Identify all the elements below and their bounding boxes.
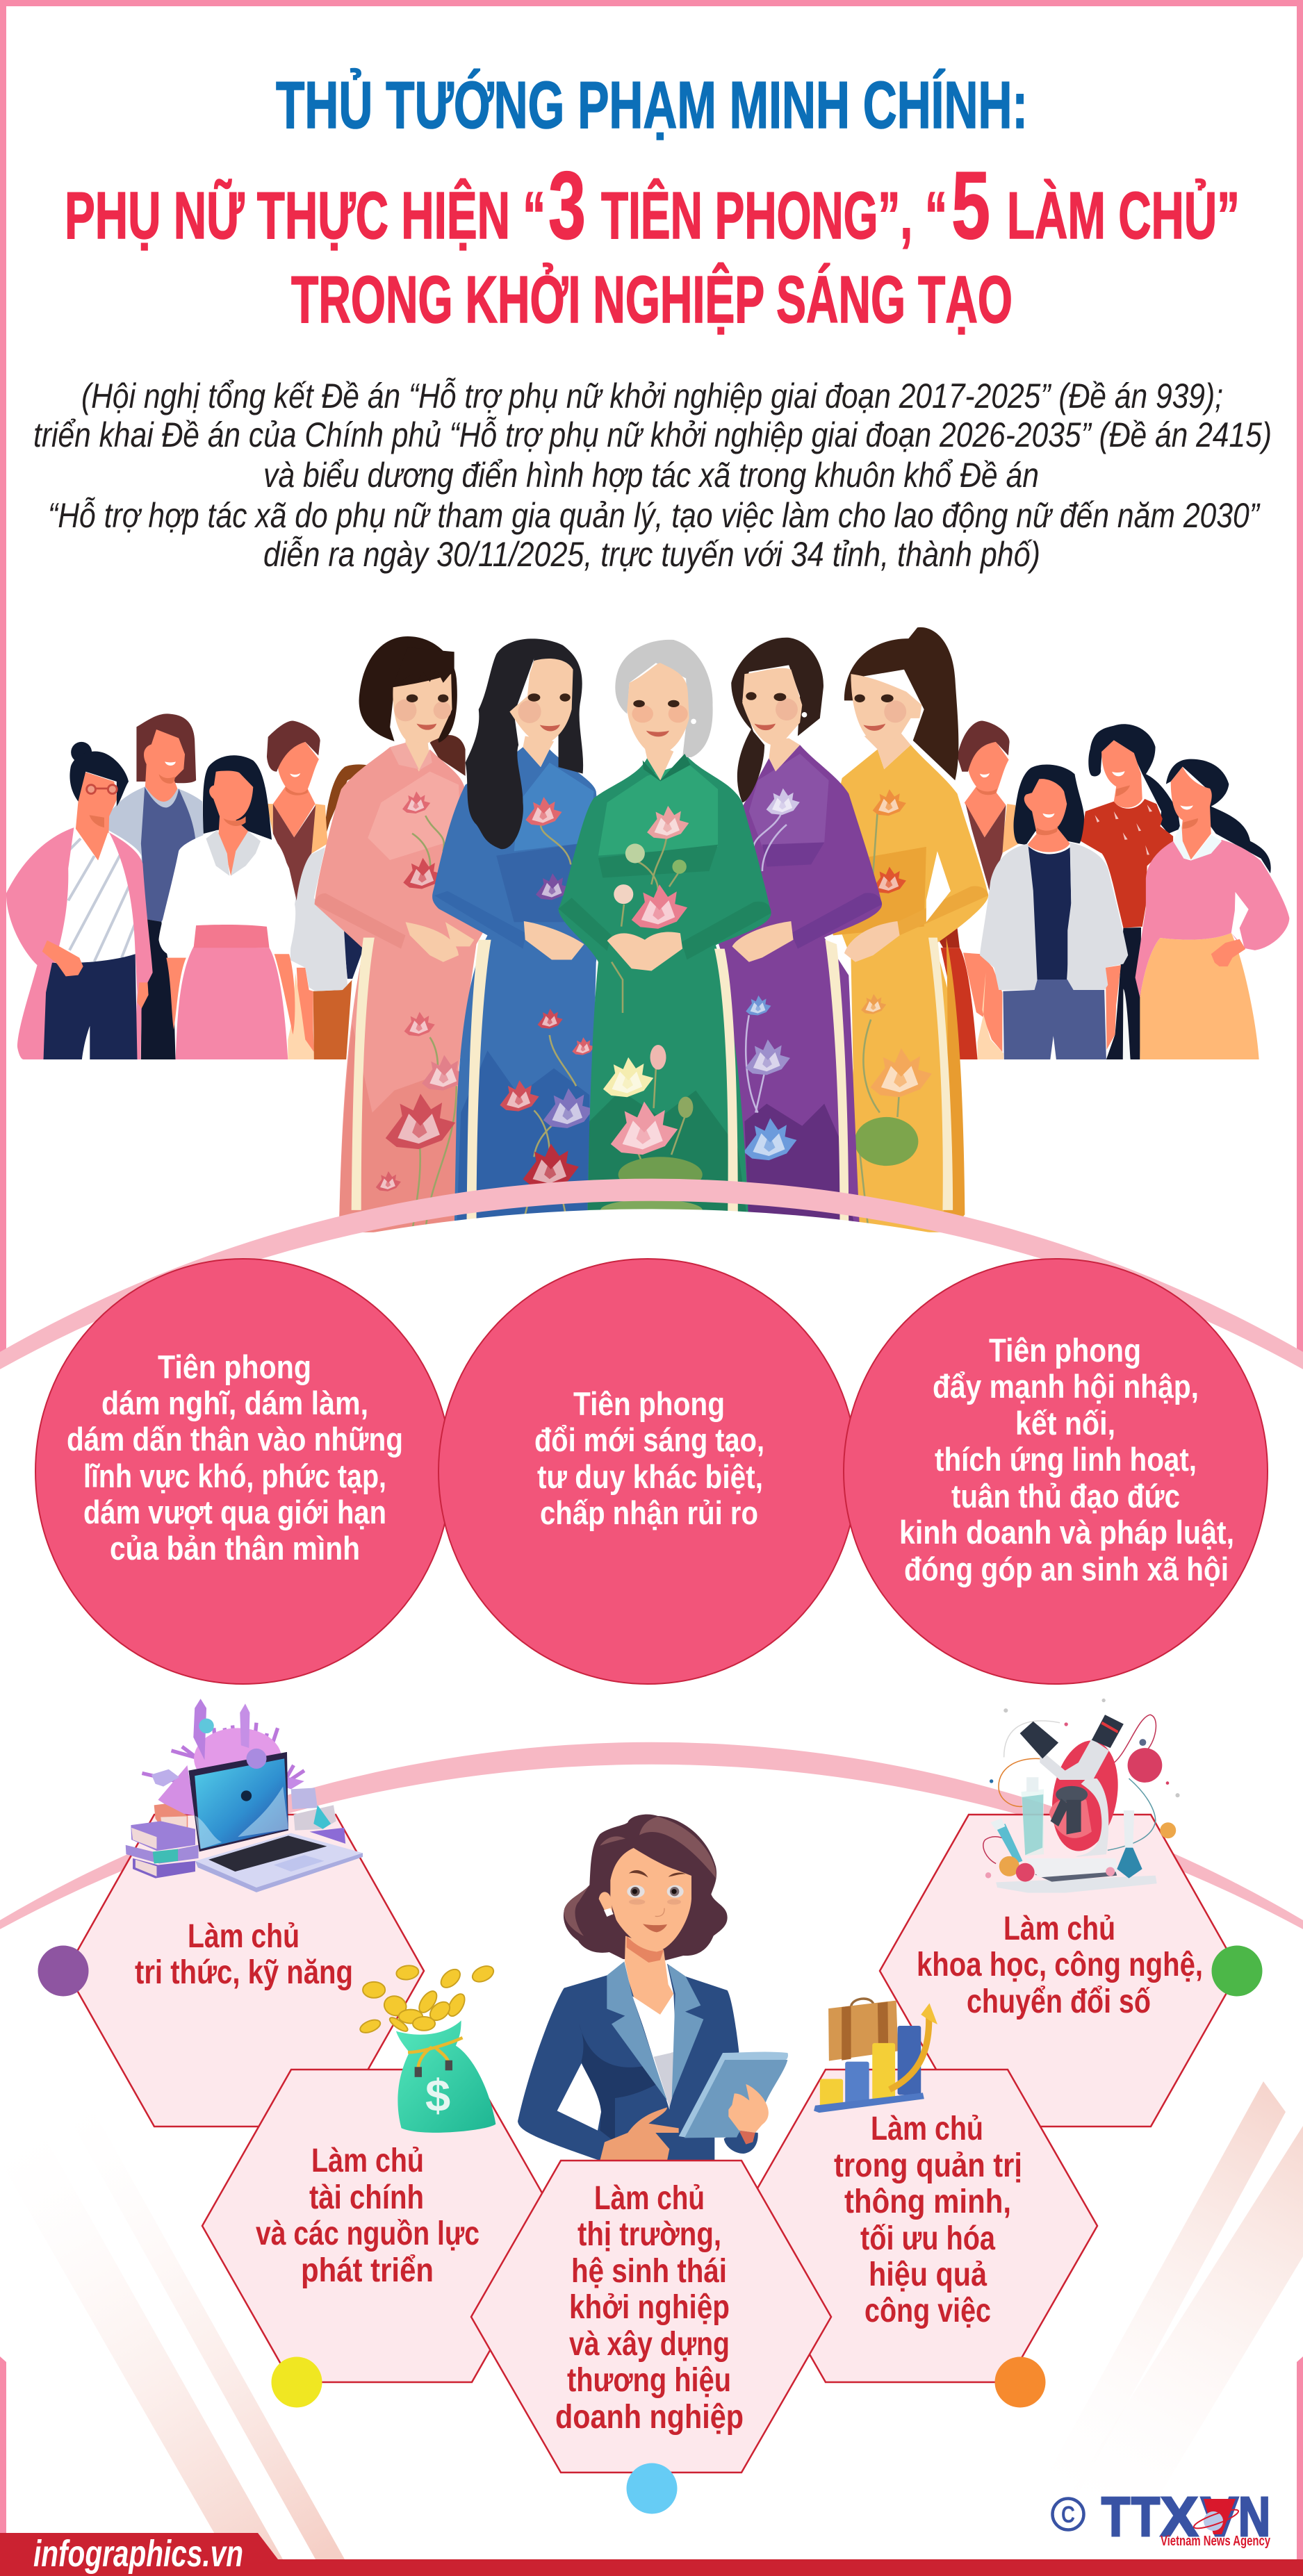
main title: TIÊN PHONG”, “ bbox=[601, 178, 947, 253]
person in blue top bbox=[104, 713, 204, 1059]
circle: middle: đổi mới sáng tạo, bbox=[534, 1421, 764, 1458]
woman: pink ao dai bbox=[315, 636, 496, 1232]
copyright mark: C bbox=[1061, 2502, 1075, 2528]
circle: left: dám dấn thân vào những bbox=[67, 1421, 403, 1458]
circle: left: dám vượt qua giới hạn bbox=[83, 1494, 386, 1530]
copyright mark bbox=[1052, 2498, 1084, 2530]
subtitle text block: diễn ra ngày 30/11/2025, trực tuyến với 34 tỉnh, thành phố) bbox=[263, 535, 1040, 574]
woman: blue ao dai bbox=[432, 638, 607, 1232]
panel: hexagon knowledge: tri thức, kỹ năng bbox=[135, 1954, 353, 1991]
logo TTXVN: N bbox=[1238, 2486, 1270, 2548]
panel: hexagon management bbox=[736, 2070, 1097, 2382]
circle: right: kết nối, bbox=[1015, 1405, 1115, 1442]
lower pink arc band bbox=[0, 1742, 1303, 1929]
icon: microscope and flasks bbox=[983, 1699, 1180, 1893]
panel: hexagon finance: tài chính bbox=[309, 2179, 424, 2216]
person in pink sweater and orange skirt bbox=[1136, 759, 1289, 1059]
main title: 3 bbox=[548, 152, 586, 259]
person in white blouse and pink skirt bbox=[159, 755, 295, 1059]
background crowd left bbox=[6, 713, 377, 1059]
circle: left: lĩnh vực khó, phức tạp, bbox=[83, 1458, 386, 1494]
circle: left: dám nghĩ, dám làm, bbox=[101, 1385, 368, 1421]
woman: purple ao dai bbox=[707, 638, 882, 1232]
woman: yellow ao dai bbox=[818, 627, 988, 1232]
logo TTXVN: X bbox=[1161, 2486, 1198, 2548]
person with pink cardigan and glasses bbox=[6, 742, 153, 1059]
panel: hexagon management: hiệu quả bbox=[869, 2256, 987, 2293]
circle: right: tuân thủ đạo đức bbox=[951, 1478, 1180, 1514]
circle: right: Tiên phong bbox=[989, 1332, 1141, 1369]
panel: hexagon market: Làm chủ bbox=[594, 2180, 705, 2217]
circle: middle: tư duy khác biệt, bbox=[537, 1458, 763, 1495]
five women in ao dai bbox=[315, 627, 988, 1232]
circle: right bbox=[844, 1259, 1268, 1684]
circle: left: của bản thân mình bbox=[110, 1530, 360, 1567]
decorative stripes bbox=[0, 1944, 1303, 2559]
panel: hexagon science technology: khoa học, công nghệ, bbox=[917, 1947, 1203, 1983]
panel: hexagon finance: và các nguồn lực bbox=[256, 2215, 480, 2252]
subtitle text block bbox=[33, 377, 1272, 574]
main title: 5 bbox=[951, 152, 990, 259]
circle: right: đẩy mạnh hội nhập, bbox=[933, 1368, 1199, 1405]
upper pink arc band bbox=[0, 1179, 1303, 1369]
panel: hexagon market: và xây dựng bbox=[569, 2326, 730, 2363]
panel: hexagon knowledge: Làm chủ bbox=[188, 1918, 300, 1955]
panel: hexagon knowledge bbox=[66, 1815, 424, 2127]
panel: hexagon market: khởi nghiệp bbox=[569, 2289, 730, 2326]
panel: hexagon market: hệ sinh thái bbox=[571, 2253, 727, 2290]
subtitle text block: và biểu dương điển hình hợp tác xã trong khuôn khổ Đề án bbox=[263, 456, 1039, 495]
circle: left: Tiên phong bbox=[158, 1348, 311, 1385]
icon: briefcase and bar chart bbox=[814, 1999, 937, 2113]
panel: hexagon management: Làm chủ bbox=[871, 2111, 983, 2147]
logo TTXVN bbox=[1101, 2486, 1271, 2549]
circle: middle: chấp nhận rủi ro bbox=[540, 1494, 758, 1531]
circle: right: kinh doanh và pháp luật, bbox=[899, 1514, 1234, 1551]
colored dots bbox=[38, 1945, 1262, 2513]
main title bbox=[65, 67, 1240, 337]
circle: left bbox=[35, 1259, 451, 1684]
panel: hexagon finance: phát triển bbox=[301, 2252, 434, 2289]
icon: money bag with coins: $ bbox=[425, 2070, 450, 2120]
panel: hexagon science technology: chuyển đổi số bbox=[967, 1983, 1151, 2020]
panel: three pioneering circles bbox=[35, 1259, 1268, 1684]
circle: middle bbox=[439, 1259, 857, 1684]
presenter woman with tablet bbox=[518, 1815, 788, 2161]
logo TTXVN: T bbox=[1131, 2486, 1160, 2548]
panel: hexagon market bbox=[471, 2161, 831, 2472]
panel: hexagon science technology: Làm chủ bbox=[1003, 1910, 1115, 1947]
background crowd right bbox=[936, 720, 1289, 1059]
source tag infographics.vn: infographics.vn bbox=[33, 2533, 243, 2575]
panel: hexagon management: công việc bbox=[864, 2293, 991, 2329]
panel: hexagon finance bbox=[202, 2070, 561, 2382]
bottom red bar bbox=[0, 2559, 1303, 2576]
main title: PHỤ NỮ THỰC HIỆN “ bbox=[65, 178, 546, 253]
person in brown top bbox=[267, 720, 327, 900]
white cut-out under dresses bbox=[0, 1209, 1303, 1382]
icon: money bag with coins bbox=[359, 1963, 496, 2133]
circle: right: đóng góp an sinh xã hội bbox=[904, 1551, 1229, 1587]
panel: hexagon management: trong quản trị bbox=[834, 2147, 1022, 2184]
panel: hexagon market: thương hiệu bbox=[567, 2362, 731, 2399]
panel: hexagon finance: Làm chủ bbox=[311, 2142, 424, 2179]
woman: green ao dai bbox=[559, 640, 771, 1232]
logo TTXVN: T bbox=[1101, 2486, 1130, 2548]
panel: hexagon management: tối ưu hóa bbox=[860, 2220, 995, 2257]
person in grey cardigan bbox=[980, 764, 1128, 1059]
person in red sweater bbox=[1081, 724, 1180, 1059]
circle: right: thích ứng linh hoạt, bbox=[935, 1441, 1197, 1478]
panel: hexagon science technology bbox=[880, 1815, 1239, 2127]
person in brown top right bbox=[936, 720, 1019, 1059]
person in grey jacket behind pink dress bbox=[288, 764, 377, 1059]
panel: hexagon management: thông minh, bbox=[844, 2183, 1011, 2220]
panel: hexagon market: thị trường, bbox=[577, 2216, 721, 2253]
icon: laptop and books bbox=[126, 1699, 363, 1892]
logo TTXVN: V bbox=[1201, 2486, 1238, 2548]
circle: middle: Tiên phong bbox=[573, 1385, 725, 1422]
panel: hexagon market: doanh nghiệp bbox=[555, 2399, 744, 2436]
